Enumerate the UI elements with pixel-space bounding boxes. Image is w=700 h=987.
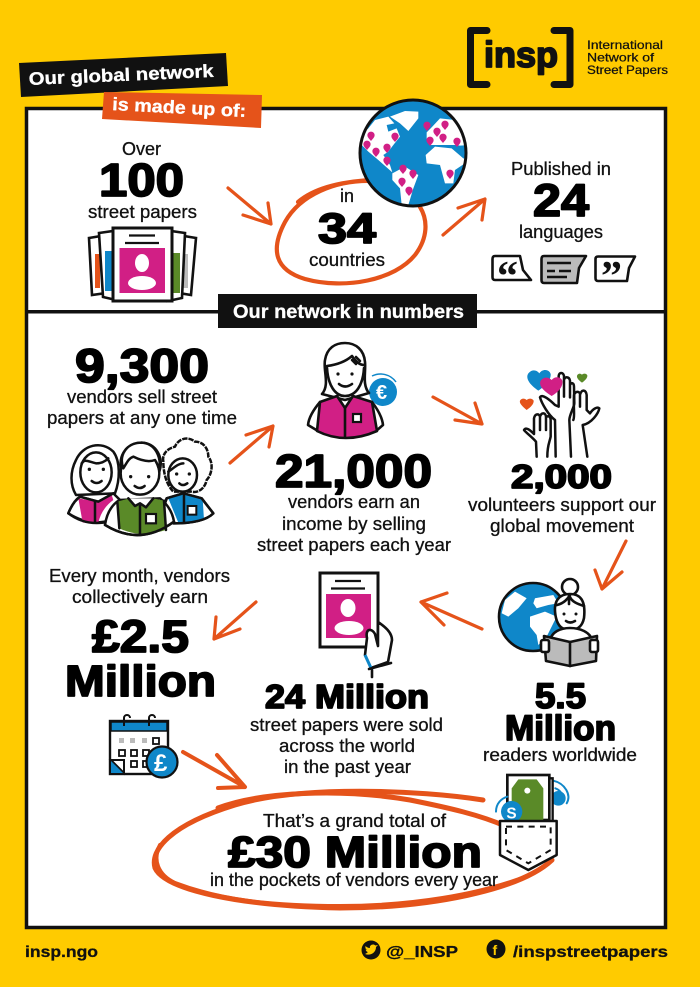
- stat: published in 24 languages: [511, 159, 611, 242]
- footer: facebook handle: [486, 940, 668, 961]
- icon: reader with globe and book: [499, 579, 598, 666]
- stat: 2,000 volunteers: [468, 458, 656, 536]
- footer: website: insp.ngo: [25, 944, 98, 961]
- heading banner: our network in numbers: Our network in numbers: [233, 302, 464, 323]
- arrow: calendar to grand total: [183, 752, 245, 788]
- stat: 9,300 vendors: [47, 339, 237, 428]
- stat: 5.5 million readers: readers worldwide: [483, 745, 637, 765]
- stat: grand total: [210, 811, 498, 890]
- icon: speech bubbles: ”: [601, 254, 622, 300]
- stat: grand total: That’s a grand total of: [263, 811, 447, 831]
- stat: grand total: £30 Million: [228, 828, 482, 877]
- icon: street paper in hand: [320, 573, 392, 677]
- stat: in 34 countries: in: [340, 186, 354, 206]
- stat: in 34 countries: countries: [309, 250, 385, 270]
- logo: insp: [470, 30, 668, 84]
- stat: 9,300 vendors: 9,300: [75, 339, 209, 392]
- stat: 2,000 volunteers: 2,000: [511, 458, 612, 495]
- stat: 21,000 vendors: 21,000: [275, 445, 432, 497]
- heading banner: is made up of: [102, 92, 262, 128]
- stat: 5.5 million readers: [483, 677, 637, 765]
- stat: 24 million papers: 24 Million: [265, 678, 429, 715]
- logo: insp: Network of: [587, 50, 655, 64]
- stat: published in 24 languages: Published in: [511, 159, 611, 179]
- stat: over 100 street papers: street papers: [88, 202, 197, 222]
- stat: 21,000 vendors: [257, 445, 451, 555]
- stat: monthly earnings: Million: [65, 657, 216, 706]
- icon: pocket with money: S: [506, 806, 517, 823]
- icon: pocket with money: [496, 775, 568, 870]
- stat: 9,300 vendors: vendors sell street: [67, 387, 217, 407]
- arrow: vendors to income: [230, 426, 273, 463]
- stat: over 100 street papers: 100: [99, 154, 184, 206]
- icon: group of three vendors: [68, 439, 213, 535]
- arrow: papers to countries: [228, 188, 271, 224]
- arrow: volunteers to readers: [595, 541, 626, 589]
- icon: calendar with pound coin: £: [154, 750, 168, 777]
- stat: published in 24 languages: 24: [533, 175, 589, 226]
- stat: in 34 countries: 34: [318, 205, 376, 253]
- stat: 24 million papers: [250, 678, 443, 777]
- logo: insp: Street Papers: [587, 63, 668, 77]
- stat: over 100 street papers: [88, 139, 197, 222]
- stat: 24 million papers: street papers were sold: [250, 715, 443, 735]
- stat: monthly earnings: collectively earn: [72, 587, 208, 607]
- stat: in 34 countries: [309, 186, 385, 270]
- stat: 9,300 vendors: papers at any one time: [47, 408, 237, 428]
- stat: 24 million papers: in the past year: [284, 757, 411, 777]
- stat: monthly earnings: Every month, vendors: [49, 566, 230, 586]
- stat: 21,000 vendors: street papers each year: [257, 535, 451, 555]
- footer: twitter handle: @_INSP: [386, 944, 458, 961]
- arrow: income to volunteers: [433, 397, 482, 424]
- heading banner: our network in numbers: [218, 294, 477, 328]
- footer: facebook handle: /inspstreetpapers: [513, 944, 668, 961]
- stat: 2,000 volunteers: global movement: [490, 516, 634, 536]
- logo: insp: International: [587, 38, 663, 52]
- stat: 21,000 vendors: vendors earn an: [288, 492, 420, 512]
- stat: 2,000 volunteers: volunteers support our: [468, 495, 656, 515]
- heading banner: our global network: Our global network: [28, 61, 215, 89]
- icon: calendar with pound coin: [110, 715, 178, 778]
- stat: monthly earnings: [49, 566, 230, 706]
- stat: published in 24 languages: languages: [519, 222, 603, 242]
- hand drawn circle around 34 countries: [277, 180, 425, 283]
- hand drawn ellipse around grand total: [154, 791, 552, 908]
- stat: 21,000 vendors: income by selling: [282, 514, 426, 534]
- stat: 5.5 million readers: 5.5: [535, 677, 586, 716]
- arrow: countries to languages: [443, 199, 485, 235]
- stat: 5.5 million readers: Million: [505, 709, 616, 748]
- icon: stack of street papers: [89, 228, 196, 301]
- footer: twitter handle: [362, 940, 458, 961]
- heading banner: is made up of: is made up of:: [112, 94, 247, 121]
- icon: vendor with euro coin: €: [376, 382, 387, 404]
- logo: insp: insp: [484, 34, 558, 75]
- icon: vendor with euro coin: [308, 343, 397, 438]
- icon: speech bubbles: [492, 254, 635, 300]
- arrow: papers sold to monthly earnings: [214, 602, 256, 639]
- stat: 24 million papers: across the world: [279, 736, 415, 756]
- icon: globe with pins: [360, 100, 470, 206]
- stat: over 100 street papers: Over: [122, 139, 161, 159]
- icon: raised hands with hearts: [520, 370, 599, 457]
- stat: monthly earnings: £2.5: [92, 611, 189, 662]
- footer: facebook handle: f: [492, 942, 498, 958]
- icon: speech bubbles: “: [497, 254, 518, 300]
- arrow: readers to papers sold: [421, 593, 482, 629]
- heading banner: our global network: [19, 53, 228, 97]
- stat: grand total: in the pockets of vendors every year: [210, 870, 498, 890]
- main white panel: [26, 108, 666, 928]
